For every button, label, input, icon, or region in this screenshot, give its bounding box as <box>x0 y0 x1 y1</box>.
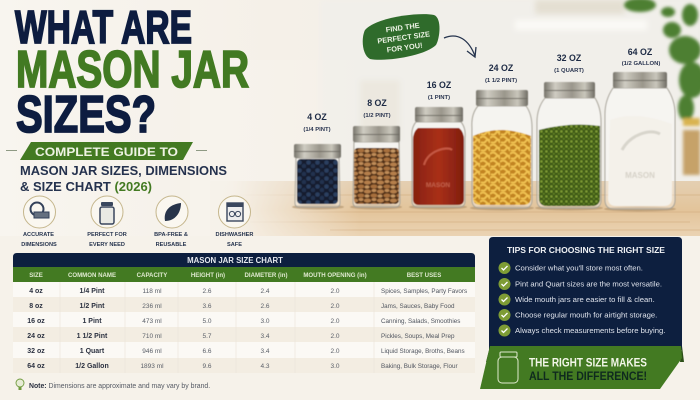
table row: 16 oz: 3.0 <box>260 318 270 325</box>
callout: find the perfect size <box>363 14 440 60</box>
table row: 24 oz: 24 oz <box>27 333 45 340</box>
arrow <box>444 36 476 57</box>
table row: 24 oz: 5.7 <box>202 333 212 340</box>
jar: 32 oz <box>535 53 603 210</box>
icon: measuring tape: ACCURATE <box>23 232 54 238</box>
icon: dishwasher: DISHWASHER <box>216 232 253 238</box>
jar: 32 oz: (1 QUART) <box>554 68 584 74</box>
tip 4: Choose regular mouth for airtight storage. <box>515 310 657 320</box>
banner: the right size makes all the difference: THE RIGHT SIZE MAKES <box>529 356 647 370</box>
banner: the right size makes all the difference: ALL THE DIFFERENCE! <box>529 369 647 383</box>
icon: measuring tape <box>21 196 57 248</box>
banner: the right size makes all the difference <box>480 346 684 389</box>
jar: 24 oz <box>470 63 534 210</box>
tip 3 <box>498 294 655 306</box>
title: WHAT ARE <box>15 1 192 53</box>
table title bar: MASON JAR SIZE CHART <box>187 256 283 265</box>
table row: 32 oz: 1 Quart <box>80 348 105 355</box>
table row: 16 oz: Canning, Salads, Smoothies <box>381 318 460 325</box>
tip 5: Always check measurements before buying. <box>515 326 665 335</box>
table row: 4 oz: Spices, Samples, Party Favors <box>381 288 467 295</box>
title <box>15 1 249 144</box>
callout: find the perfect size: FOR YOU! <box>386 41 423 54</box>
table row: 4 oz <box>29 288 467 295</box>
tip 2 <box>498 278 662 290</box>
table row: 64 oz: 1/2 Gallon <box>75 363 109 370</box>
icon: jar <box>87 196 127 248</box>
subtitle ribbon <box>6 142 207 160</box>
table row: 4 oz: 2.6 <box>202 288 212 295</box>
table row: 32 oz: 2.0 <box>330 348 340 355</box>
jar: 4 oz <box>292 112 344 210</box>
tips panel <box>489 237 682 350</box>
jar: 8 oz: 8 OZ <box>367 98 387 108</box>
table row: 32 oz: 6.6 <box>202 348 212 355</box>
table row: 8 oz: 2.0 <box>330 303 340 310</box>
table row: 64 oz: Baking, Bulk Storage, Flour <box>381 363 458 370</box>
jar: 8 oz: (1/2 PINT) <box>363 113 391 119</box>
table title bar <box>13 253 475 267</box>
table header row: SIZE <box>29 272 43 279</box>
table header row: COMMON NAME <box>68 272 116 279</box>
jar: 64 oz: 64 OZ <box>628 47 653 57</box>
jar: 24 oz: (1 1/2 PINT) <box>485 78 517 84</box>
table row: 32 oz <box>27 348 465 355</box>
table row: 4 oz: 4 oz <box>29 288 43 295</box>
table row: 24 oz <box>27 333 455 340</box>
table row: 16 oz: 5.0 <box>202 318 212 325</box>
note with lightbulb icon: Note: Dimensions are approximate and may vary by brand. <box>29 383 210 390</box>
jar: 32 oz: 32 OZ <box>557 53 582 63</box>
tip 5 <box>498 324 665 336</box>
icon: jar: PERFECT FOR <box>87 232 127 238</box>
table row: 32 oz: Liquid Storage, Broths, Beans <box>381 348 465 355</box>
table row: 64 oz: 1893 ml <box>140 363 164 370</box>
callout: find the perfect size: FIND THE <box>385 21 420 34</box>
table row: 24 oz: 1 1/2 Pint <box>77 333 108 340</box>
table row: 32 oz: 946 ml <box>142 348 162 355</box>
icon: jar outline <box>498 352 518 383</box>
table header row: BEST USES <box>407 272 441 279</box>
table row: 64 oz: 9.6 <box>202 363 212 370</box>
subtitle ribbon: COMPLETE GUIDE TO <box>35 145 178 159</box>
table header row: DIAMETER (in) <box>244 272 288 279</box>
jar: 24 oz: 24 OZ <box>489 63 514 73</box>
tip 1: Consider what you'll store most often. <box>515 264 643 272</box>
tip 4 <box>498 309 657 321</box>
table row: 16 oz: 16 oz <box>27 318 45 325</box>
title: SIZES? <box>16 86 156 144</box>
jar: 8 oz <box>350 98 402 210</box>
table row: 8 oz: 8 oz <box>29 303 43 310</box>
subtitle text: MASON JAR SIZES, DIMENSIONS <box>20 164 227 178</box>
table row: 16 oz: 473 ml <box>142 318 162 325</box>
jar: 16 oz <box>409 80 467 210</box>
table row: 8 oz <box>29 303 455 310</box>
table row: 8 oz: 3.6 <box>202 303 212 310</box>
table row: 32 oz: 3.4 <box>260 348 270 355</box>
icon: measuring tape: DIMENSIONS <box>21 242 57 248</box>
jar: 64 oz <box>604 47 676 212</box>
callout: find the perfect size: PERFECT SIZE <box>377 29 431 46</box>
table row: 24 oz: 3.4 <box>260 333 270 340</box>
table row: 8 oz: 1/2 Pint <box>80 303 105 310</box>
jar: 4 oz: (1/4 PINT) <box>303 127 331 133</box>
jar: 16 oz: MASON <box>426 182 450 189</box>
icon: dishwasher <box>216 196 253 248</box>
title: MASON JAR <box>16 41 249 99</box>
jar: 64 oz: MASON <box>625 171 655 180</box>
tip 3: Wide mouth jars are easier to fill & clean. <box>515 295 655 304</box>
table row: 4 oz: 1/4 Pint <box>80 288 105 295</box>
table row: 16 oz: 1 Pint <box>82 318 102 325</box>
tip 1 <box>498 262 643 274</box>
table row: 24 oz: Pickles, Soups, Meal Prep <box>381 333 455 340</box>
subtitle text <box>20 164 227 194</box>
table header row: CAPACITY <box>137 272 167 279</box>
icon: leaf: BPA-FREE & <box>154 232 188 238</box>
jar: 16 oz: 16 OZ <box>427 80 452 90</box>
table row: 24 oz: 710 ml <box>142 333 162 340</box>
table row: 4 oz: 2.4 <box>260 288 270 295</box>
table row: 64 oz: 64 oz <box>27 363 45 370</box>
table header row <box>13 267 475 282</box>
table row: 4 oz: 2.0 <box>330 288 340 295</box>
subtitle text: & SIZE CHART (2026) <box>20 180 152 194</box>
icon: jar: EVERY NEED <box>89 242 125 248</box>
jar: 64 oz: (1/2 GALLON) <box>622 61 660 67</box>
table row: 32 oz: 32 oz <box>27 348 45 355</box>
table row: 8 oz: 236 ml <box>142 303 162 310</box>
feature icons <box>21 196 253 248</box>
table header row: MOUTH OPENING (in) <box>303 272 367 279</box>
icon: dishwasher: SAFE <box>227 242 242 248</box>
table row: 16 oz <box>27 318 460 325</box>
table row: 24 oz: 2.0 <box>330 333 340 340</box>
note with lightbulb icon <box>16 379 210 390</box>
icon: leaf <box>154 196 188 248</box>
tip 2: Pint and Quart sizes are the most versatile. <box>515 280 662 288</box>
table row: 4 oz: 118 ml <box>142 288 162 295</box>
table row: 16 oz: 2.0 <box>330 318 340 325</box>
jar: 4 oz: 4 OZ <box>307 112 327 122</box>
table row: 64 oz: 4.3 <box>260 363 270 370</box>
tips heading: TIPS FOR CHOOSING THE RIGHT SIZE <box>507 246 666 255</box>
table header row: HEIGHT (in) <box>191 272 225 279</box>
table row: 64 oz: 3.0 <box>330 363 340 370</box>
table row: 64 oz <box>27 363 458 370</box>
icon: leaf: REUSABLE <box>156 242 187 248</box>
size chart table <box>13 253 475 373</box>
jar: 16 oz: (1 PINT) <box>428 95 450 101</box>
table row: 8 oz: Jams, Sauces, Baby Food <box>381 303 455 310</box>
table row: 8 oz: 2.6 <box>260 303 270 310</box>
